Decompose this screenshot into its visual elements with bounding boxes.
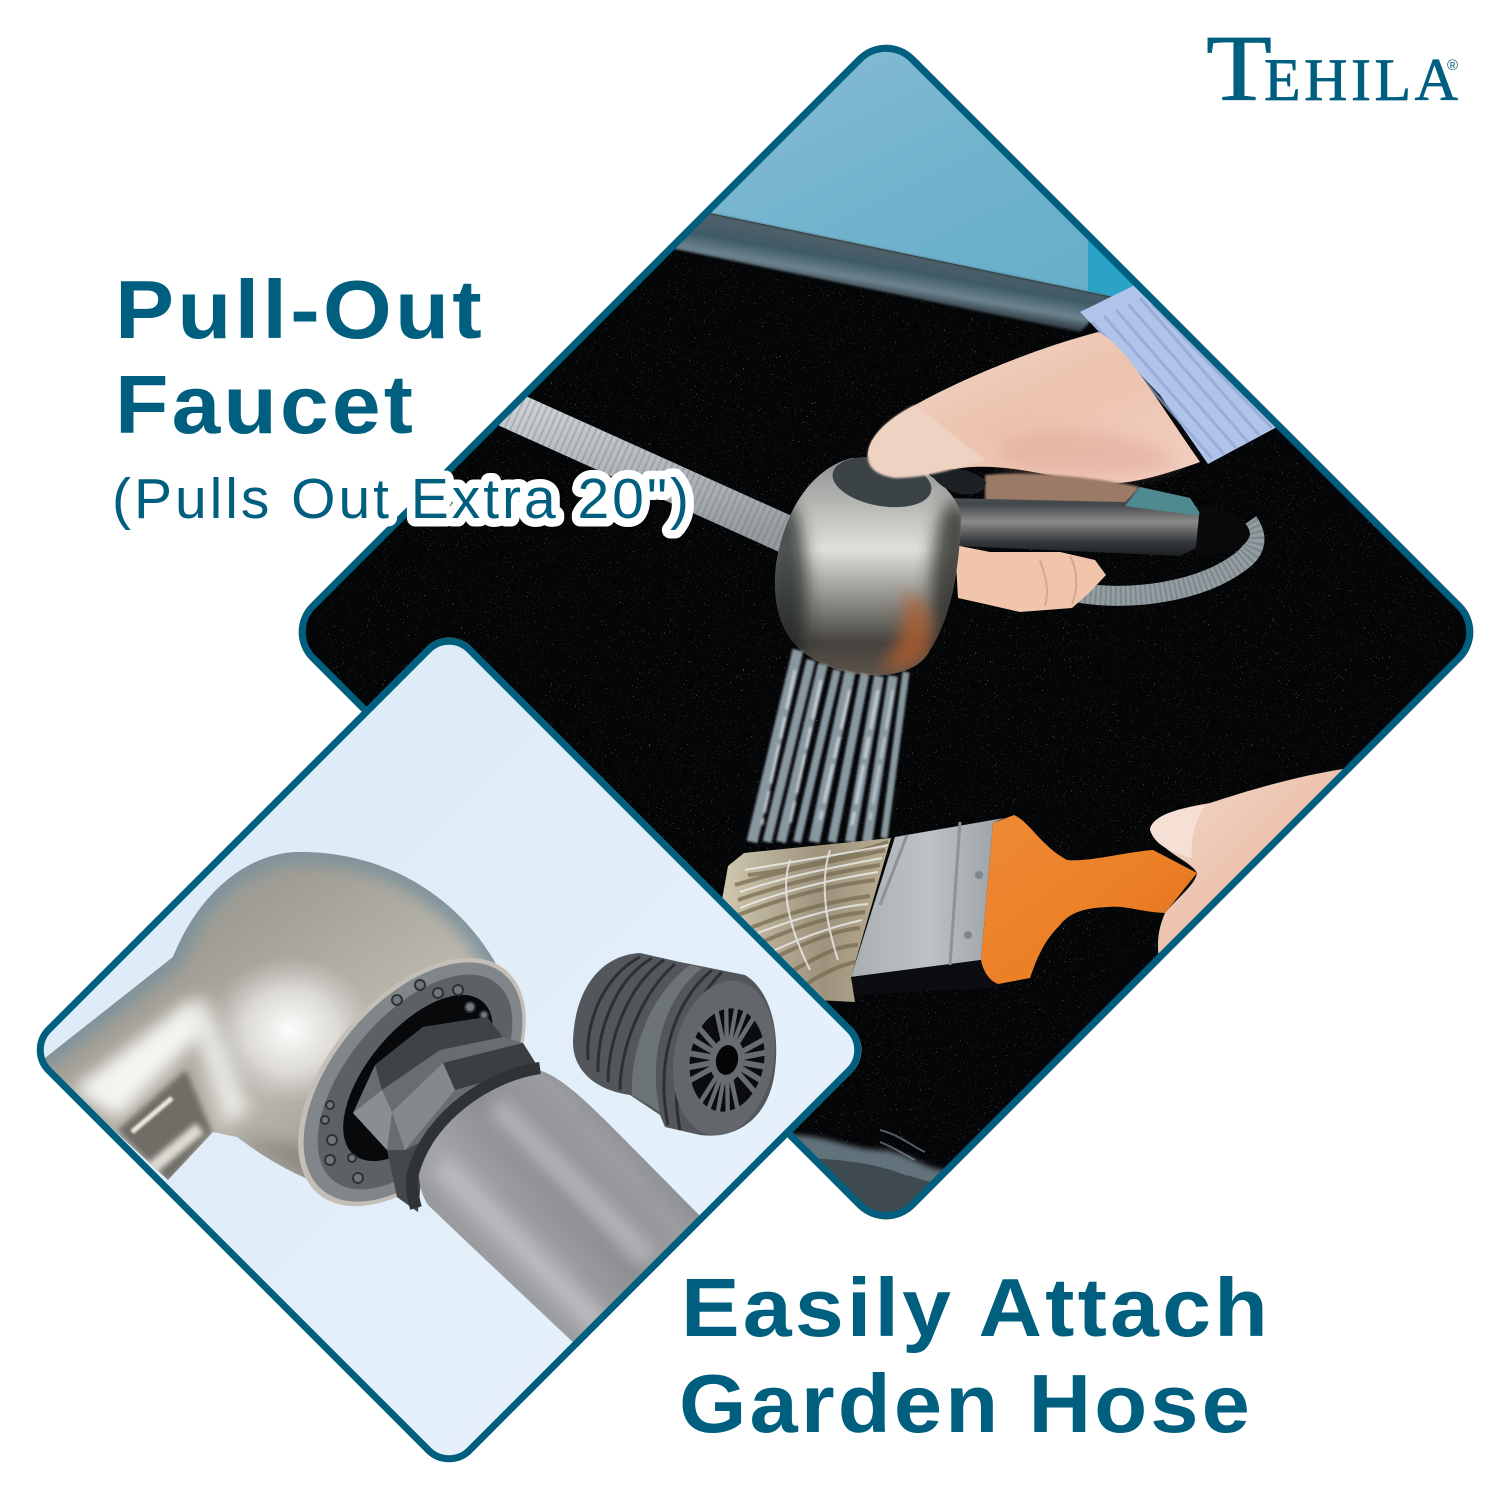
- heading: Pull-Out Faucet: Faucet: [115, 358, 416, 451]
- trigger lever: [930, 469, 986, 494]
- heading: Easily Attach Garden Hose: Easily Attach: [681, 1261, 1271, 1354]
- sink rim: [670, 211, 1113, 332]
- copper reflection: [880, 590, 931, 670]
- brushed steel spray head: [45, 852, 496, 1180]
- logo: Tehila: ®: [1447, 57, 1458, 74]
- aerator hub: [710, 1040, 744, 1080]
- heading: Easily Attach Garden Hose: [679, 1261, 1271, 1450]
- lower dark shade: [246, 1135, 306, 1178]
- lower hand: [1150, 768, 1350, 965]
- upper hand: [868, 332, 1200, 484]
- small diamond border: [28, 629, 870, 1471]
- main highlight: [217, 962, 362, 1096]
- braided hose upper: [495, 403, 790, 536]
- lower fingers: [955, 545, 1106, 612]
- grey hose tube: [419, 1070, 702, 1347]
- palm reflection: [985, 473, 1140, 505]
- logo: Tehila: T: [1206, 17, 1272, 121]
- rubber o-ring: [412, 1068, 540, 1208]
- spray button: [832, 456, 932, 508]
- paint brush handle: [981, 815, 1197, 984]
- panel: pull-out faucet photo: [280, 20, 1490, 1240]
- thumb: [868, 405, 985, 478]
- head edge shading: [775, 498, 818, 656]
- sweater sleeve: [1080, 285, 1290, 464]
- faucet handle: [945, 487, 1250, 556]
- aerator face: [673, 981, 775, 1136]
- stem: [118, 1070, 212, 1182]
- heading: Easily Attach Garden Hose: Garden Hose: [679, 1357, 1253, 1450]
- braided hose lower loop: [1075, 522, 1254, 596]
- heading: Pull-Out Faucet: [115, 263, 485, 451]
- paint brush bristles: [722, 838, 891, 1002]
- subheading: pulls out extra: (Pulls Out Extra 20"): [112, 467, 689, 531]
- hex nut: [353, 1017, 538, 1212]
- panel: garden hose adapter photo: [20, 629, 880, 1471]
- subheading: pulls out extra: (Pulls Out Extra 20"): [112, 467, 689, 531]
- big diamond border: [287, 33, 1485, 1231]
- aerator insert: [573, 953, 787, 1143]
- paint brush ferrule: [851, 818, 1006, 995]
- arm highlight band: [72, 1000, 205, 1118]
- tube highlights: [440, 1105, 650, 1325]
- heading: Pull-Out Faucet: Pull-Out: [115, 263, 485, 356]
- blue wall behind sink: [702, 44, 1168, 310]
- water spray: [752, 650, 906, 842]
- spray face ring: [298, 958, 526, 1206]
- wet sink floor: [792, 1129, 945, 1220]
- top blue-grey edge: [40, 852, 503, 1060]
- faucet head: [775, 456, 986, 676]
- hose collar: [1195, 506, 1250, 556]
- logo: Tehila: [1206, 17, 1458, 121]
- logo: Tehila: EHILA: [1264, 47, 1458, 113]
